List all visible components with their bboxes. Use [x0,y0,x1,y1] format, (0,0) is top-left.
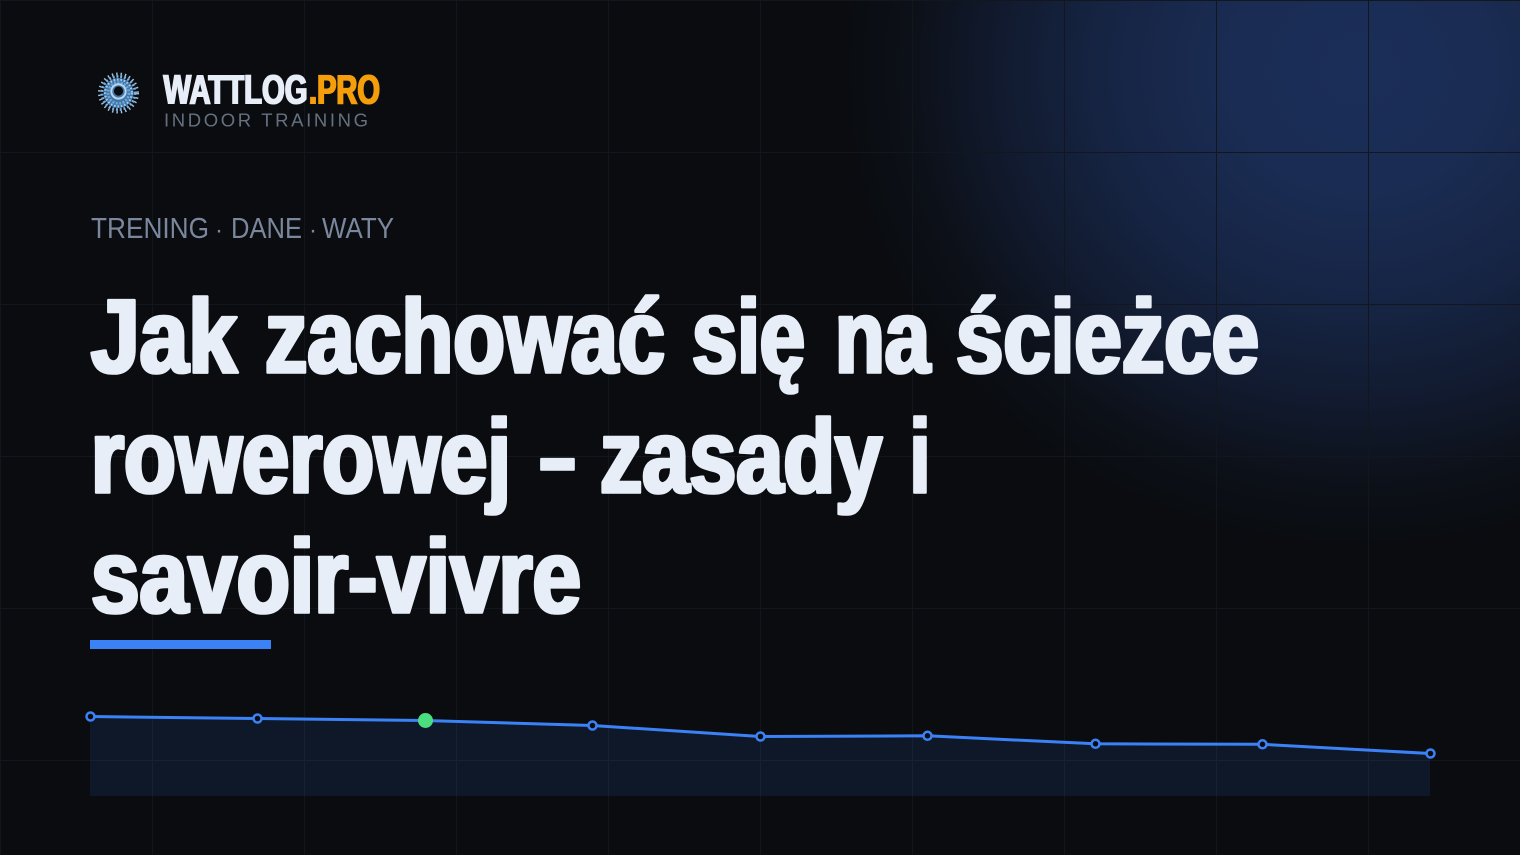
chart data points [86,712,1434,758]
title: – [540,398,575,516]
title: zachować [265,278,665,396]
title underline [90,640,271,649]
logo [99,66,380,130]
title: Jak [91,278,237,396]
eyebrow: DANE [231,213,302,245]
title: zasady [600,398,882,516]
title: się [692,278,805,396]
eyebrow: WATY [322,213,394,245]
title: i [910,398,930,516]
logo tagline: INDOOR TRAINING [164,110,368,130]
title: savoir-vivre [91,518,581,636]
title: na [835,278,931,396]
eyebrow: · [215,217,223,244]
logo wordmark: .PRO [309,66,380,112]
line chart [86,712,1434,796]
eyebrow [91,213,394,245]
highlighted data point [418,713,433,728]
chart line [90,716,1430,754]
title [91,278,1259,636]
title: ścieżce [956,278,1259,396]
chart area fill [90,716,1430,796]
eyebrow: · [309,217,317,244]
title: rowerowej [91,398,511,516]
logo wordmark: WATTLOG [164,66,308,112]
icon: cassette gear [99,74,138,112]
eyebrow: TRENING [91,213,209,245]
